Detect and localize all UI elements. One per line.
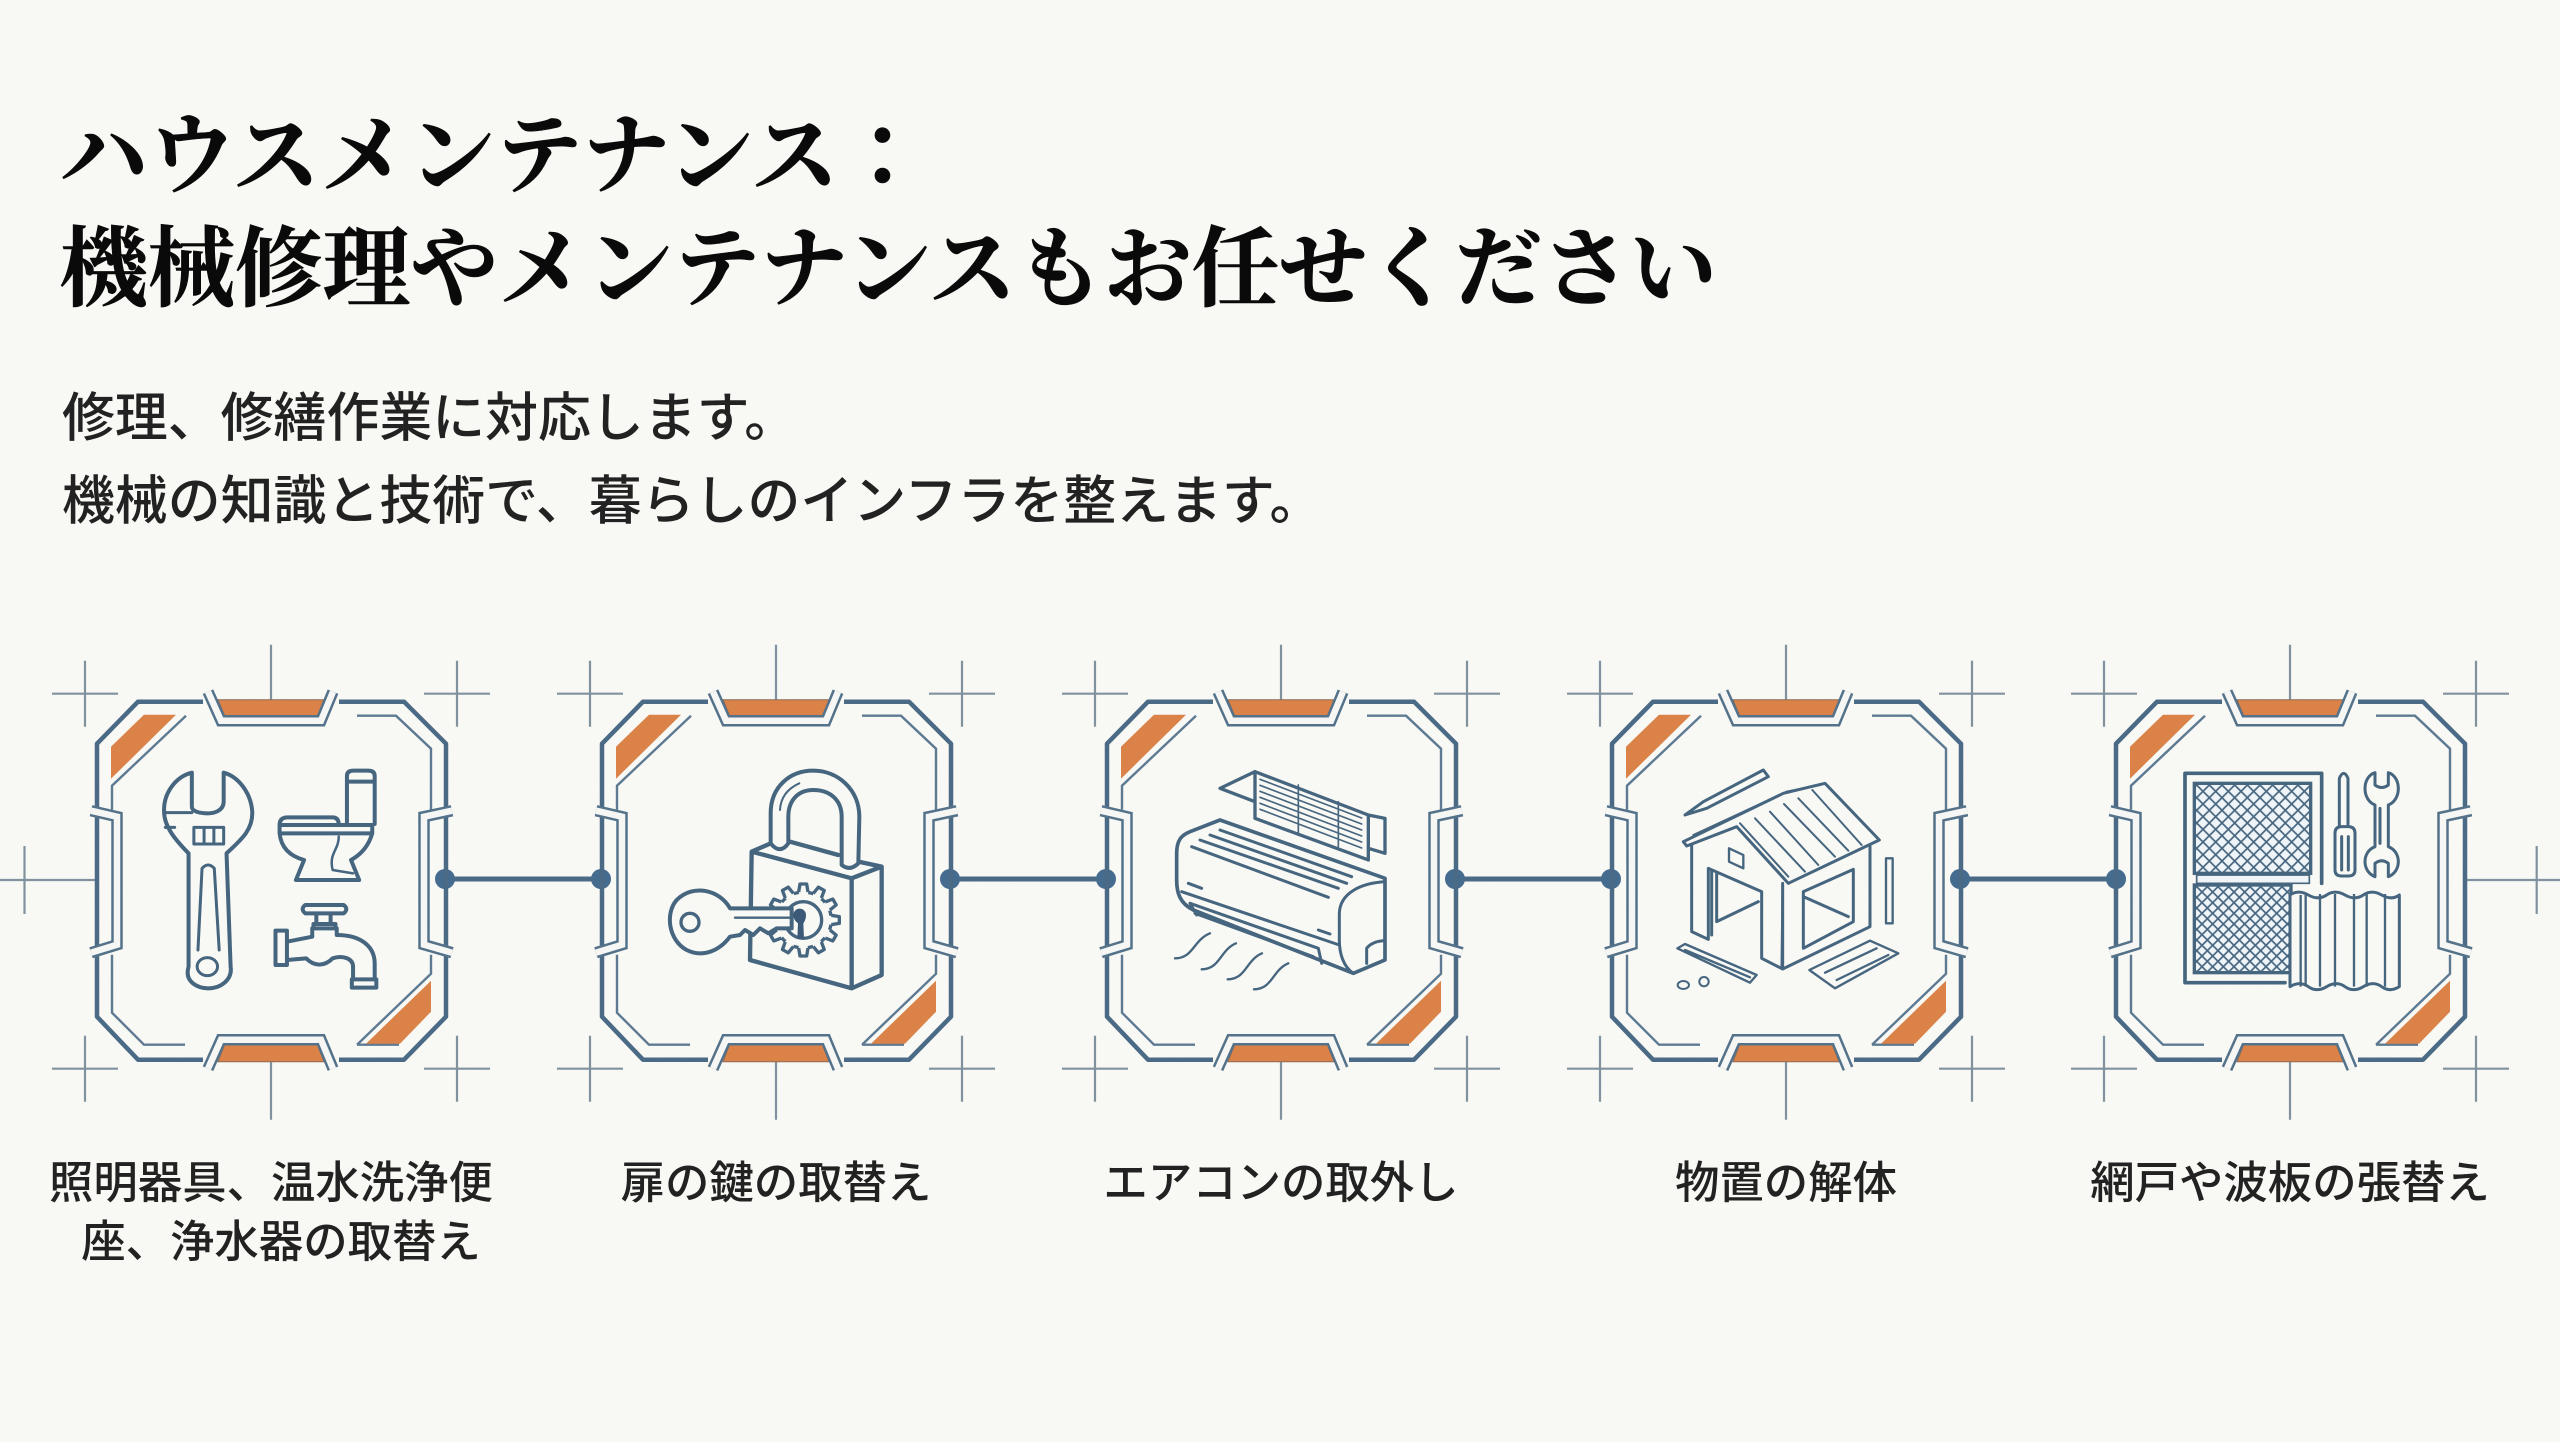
- label 5: 網戸や波板の張替え: [2090, 1159, 2490, 1208]
- intro text: 修理、修繕作業に対応します。: [62, 389, 797, 448]
- right alignment mark: [2465, 846, 2560, 914]
- label 4: 物置の解体: [1675, 1159, 1897, 1208]
- intro text: 機械の知識と技術で、暮らしのインフラを整えます。: [62, 472, 1322, 531]
- title: [60, 108, 1717, 318]
- icon: padlock and key: [670, 771, 882, 988]
- frame 1: [52, 645, 490, 1120]
- icon: screen door, corrugated panel, tools: [2185, 773, 2399, 990]
- label 2: 扉の鍵の取替え: [621, 1159, 931, 1208]
- connector 2: [940, 869, 1116, 889]
- left alignment mark: [0, 846, 97, 914]
- connector 1: [435, 869, 611, 889]
- icon: shed: [1677, 770, 1898, 989]
- label 1: [49, 1159, 493, 1267]
- title: 機械修理やメンテナンスもお任せください: [60, 221, 1717, 318]
- icon: air conditioner: [1175, 772, 1385, 989]
- label 1: 座、浄水器の取替え: [81, 1218, 481, 1267]
- frame 2: [557, 645, 995, 1120]
- frame 4: [1567, 645, 2005, 1120]
- title: ハウスメンテナンス：: [60, 108, 926, 205]
- gear: [767, 884, 839, 956]
- icon: wrench, toilet, faucet: [164, 771, 376, 988]
- connector 3: [1445, 869, 1621, 889]
- label 1: 照明器具、温水洗浄便: [49, 1159, 493, 1208]
- frame 5: [2071, 645, 2509, 1120]
- label 3: エアコンの取外し: [1103, 1159, 1459, 1208]
- frame 3: [1062, 645, 1500, 1120]
- intro text: [62, 389, 1322, 531]
- connector 4: [1950, 869, 2126, 889]
